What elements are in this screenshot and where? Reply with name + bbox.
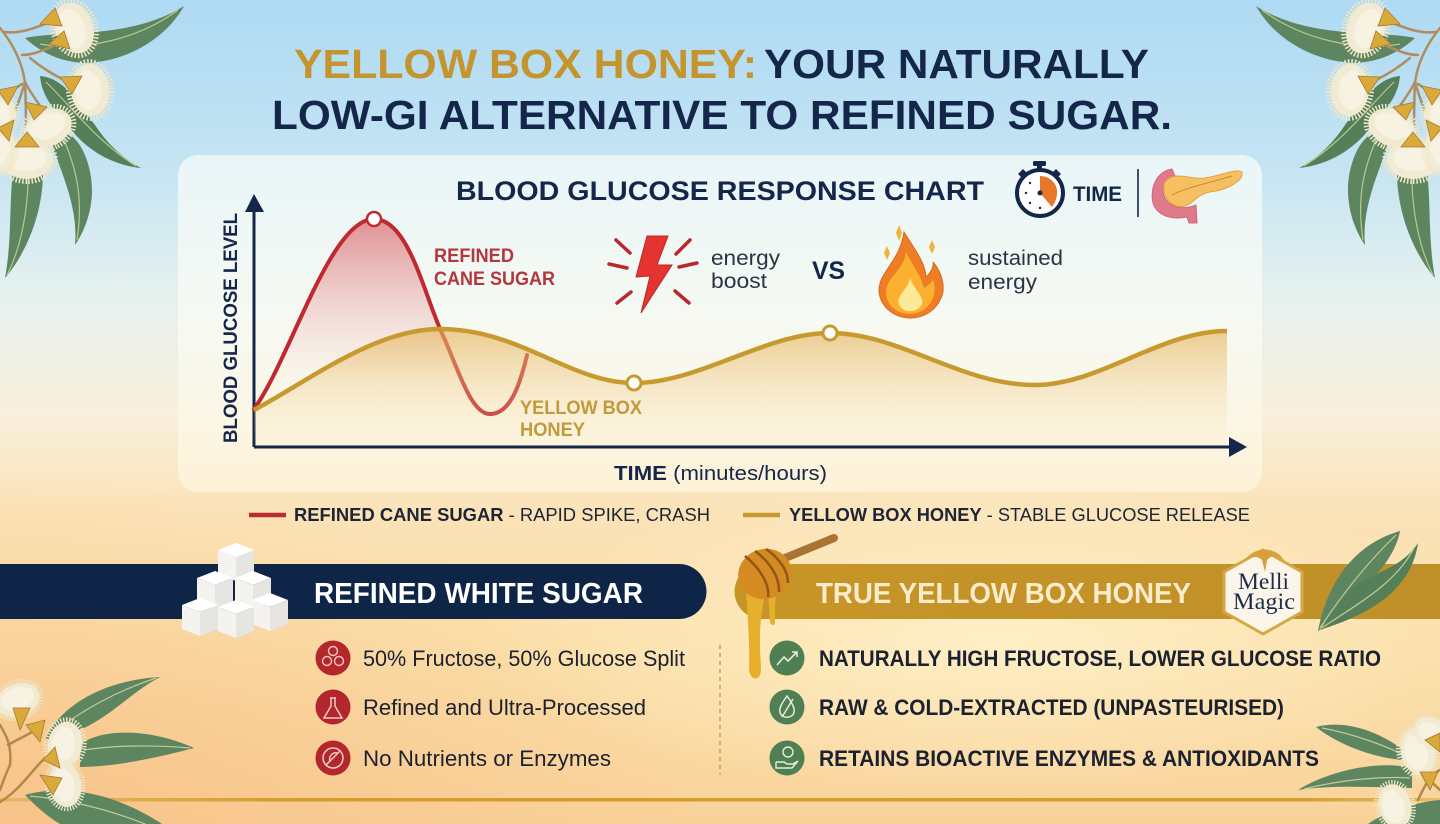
text: sustained energy bbox=[968, 247, 1063, 294]
item: high fructose bbox=[770, 640, 1381, 676]
banner: true yellow box honey bbox=[734, 564, 1440, 619]
y axis bbox=[245, 194, 264, 447]
chart heading: BLOOD GLUCOSE RESPONSE CHART bbox=[456, 176, 985, 206]
item: bioactive enzymes bbox=[770, 740, 1319, 776]
text: sustained energy: sustained bbox=[968, 247, 1063, 270]
item: no nutrients or enzymes: No Nutrients or Enzymes bbox=[363, 746, 611, 771]
item: bioactive enzymes: RETAINS BIOACTIVE ENZYMES & ANTIOXIDANTS bbox=[819, 746, 1319, 771]
icon: flame bbox=[879, 225, 943, 318]
banner: true yellow box honey: TRUE YELLOW BOX HONEY bbox=[816, 578, 1191, 610]
panel: blood glucose response chart bbox=[178, 155, 1262, 492]
curve label: yellow box honey bbox=[520, 398, 642, 441]
item: refined and ultra-processed: Refined and Ultra-Processed bbox=[363, 695, 646, 720]
legend: yellow box honey: YELLOW BOX HONEY - STABLE GLUCOSE RELEASE bbox=[789, 505, 1250, 525]
curve label: yellow box honey: YELLOW BOX bbox=[520, 398, 642, 419]
icon label: time: TIME bbox=[1073, 183, 1122, 206]
icon: eucalyptus leaves bbox=[1318, 531, 1418, 632]
list: refined sugar bbox=[316, 640, 685, 776]
item: refined and ultra-processed bbox=[316, 690, 646, 724]
icon: honey dipper bbox=[731, 538, 834, 678]
icon: lightning bolt bbox=[609, 236, 697, 313]
eucalyptus branch: bottom right bbox=[1298, 709, 1440, 824]
logo: melli magic: Melli bbox=[1238, 569, 1289, 594]
text: energy boost bbox=[711, 247, 781, 293]
title: YELLOW BOX HONEY: bbox=[294, 41, 757, 87]
curve label: refined cane sugar: REFINED bbox=[434, 246, 514, 267]
x axis label: TIME (minutes/hours) bbox=[614, 463, 827, 485]
title bbox=[272, 41, 1172, 138]
icon: pancreas bbox=[1152, 169, 1242, 223]
text: vs: VS bbox=[812, 257, 845, 285]
eucalyptus branch: top left bbox=[0, 0, 184, 278]
list: yellow box honey bbox=[770, 640, 1381, 776]
logo: melli magic bbox=[1224, 550, 1302, 634]
legend: refined cane sugar: REFINED CANE SUGAR - RAPID SPIKE, CRASH bbox=[294, 505, 710, 525]
eucalyptus branch: top right bbox=[1256, 0, 1440, 278]
curve label: yellow box honey: HONEY bbox=[520, 420, 585, 441]
eucalyptus branch: bottom left bbox=[0, 675, 194, 824]
rule: bottom bbox=[0, 798, 1440, 802]
divider: between lists bbox=[719, 645, 721, 775]
text: sustained energy: energy bbox=[968, 271, 1038, 294]
y axis label: BLOOD GLUCOSE LEVEL bbox=[221, 213, 242, 443]
item: raw and cold-extracted bbox=[770, 690, 1284, 724]
peak markers bbox=[367, 212, 837, 390]
text: energy boost: boost bbox=[711, 270, 767, 293]
item: high fructose: NATURALLY HIGH FRUCTOSE, LOWER GLUCOSE RATIO bbox=[819, 646, 1381, 671]
icon: stopwatch bbox=[1017, 161, 1063, 216]
banner: refined white sugar: REFINED WHITE SUGAR bbox=[314, 578, 643, 610]
text: energy boost: energy bbox=[711, 247, 781, 270]
logo: melli magic: Magic bbox=[1233, 589, 1295, 614]
divider: time and pancreas bbox=[1137, 169, 1139, 217]
title: LOW-GI ALTERNATIVE TO REFINED SUGAR. bbox=[272, 92, 1172, 138]
icon: sugar cubes bbox=[182, 543, 288, 638]
curve label: refined cane sugar bbox=[434, 246, 555, 290]
refined sugar curve bbox=[254, 219, 527, 447]
yellow box honey curve bbox=[254, 329, 1227, 446]
title: YOUR NATURALLY bbox=[764, 41, 1149, 87]
banner: refined white sugar bbox=[0, 564, 706, 619]
item: fructose glucose split bbox=[316, 640, 685, 676]
item: fructose glucose split: 50% Fructose, 50% Glucose Split bbox=[363, 646, 685, 671]
item: raw and cold-extracted: RAW & COLD-EXTRACTED (UNPASTEURISED) bbox=[819, 695, 1284, 720]
curve label: refined cane sugar: CANE SUGAR bbox=[434, 269, 555, 290]
item: no nutrients or enzymes bbox=[316, 740, 611, 776]
x axis bbox=[254, 437, 1247, 457]
